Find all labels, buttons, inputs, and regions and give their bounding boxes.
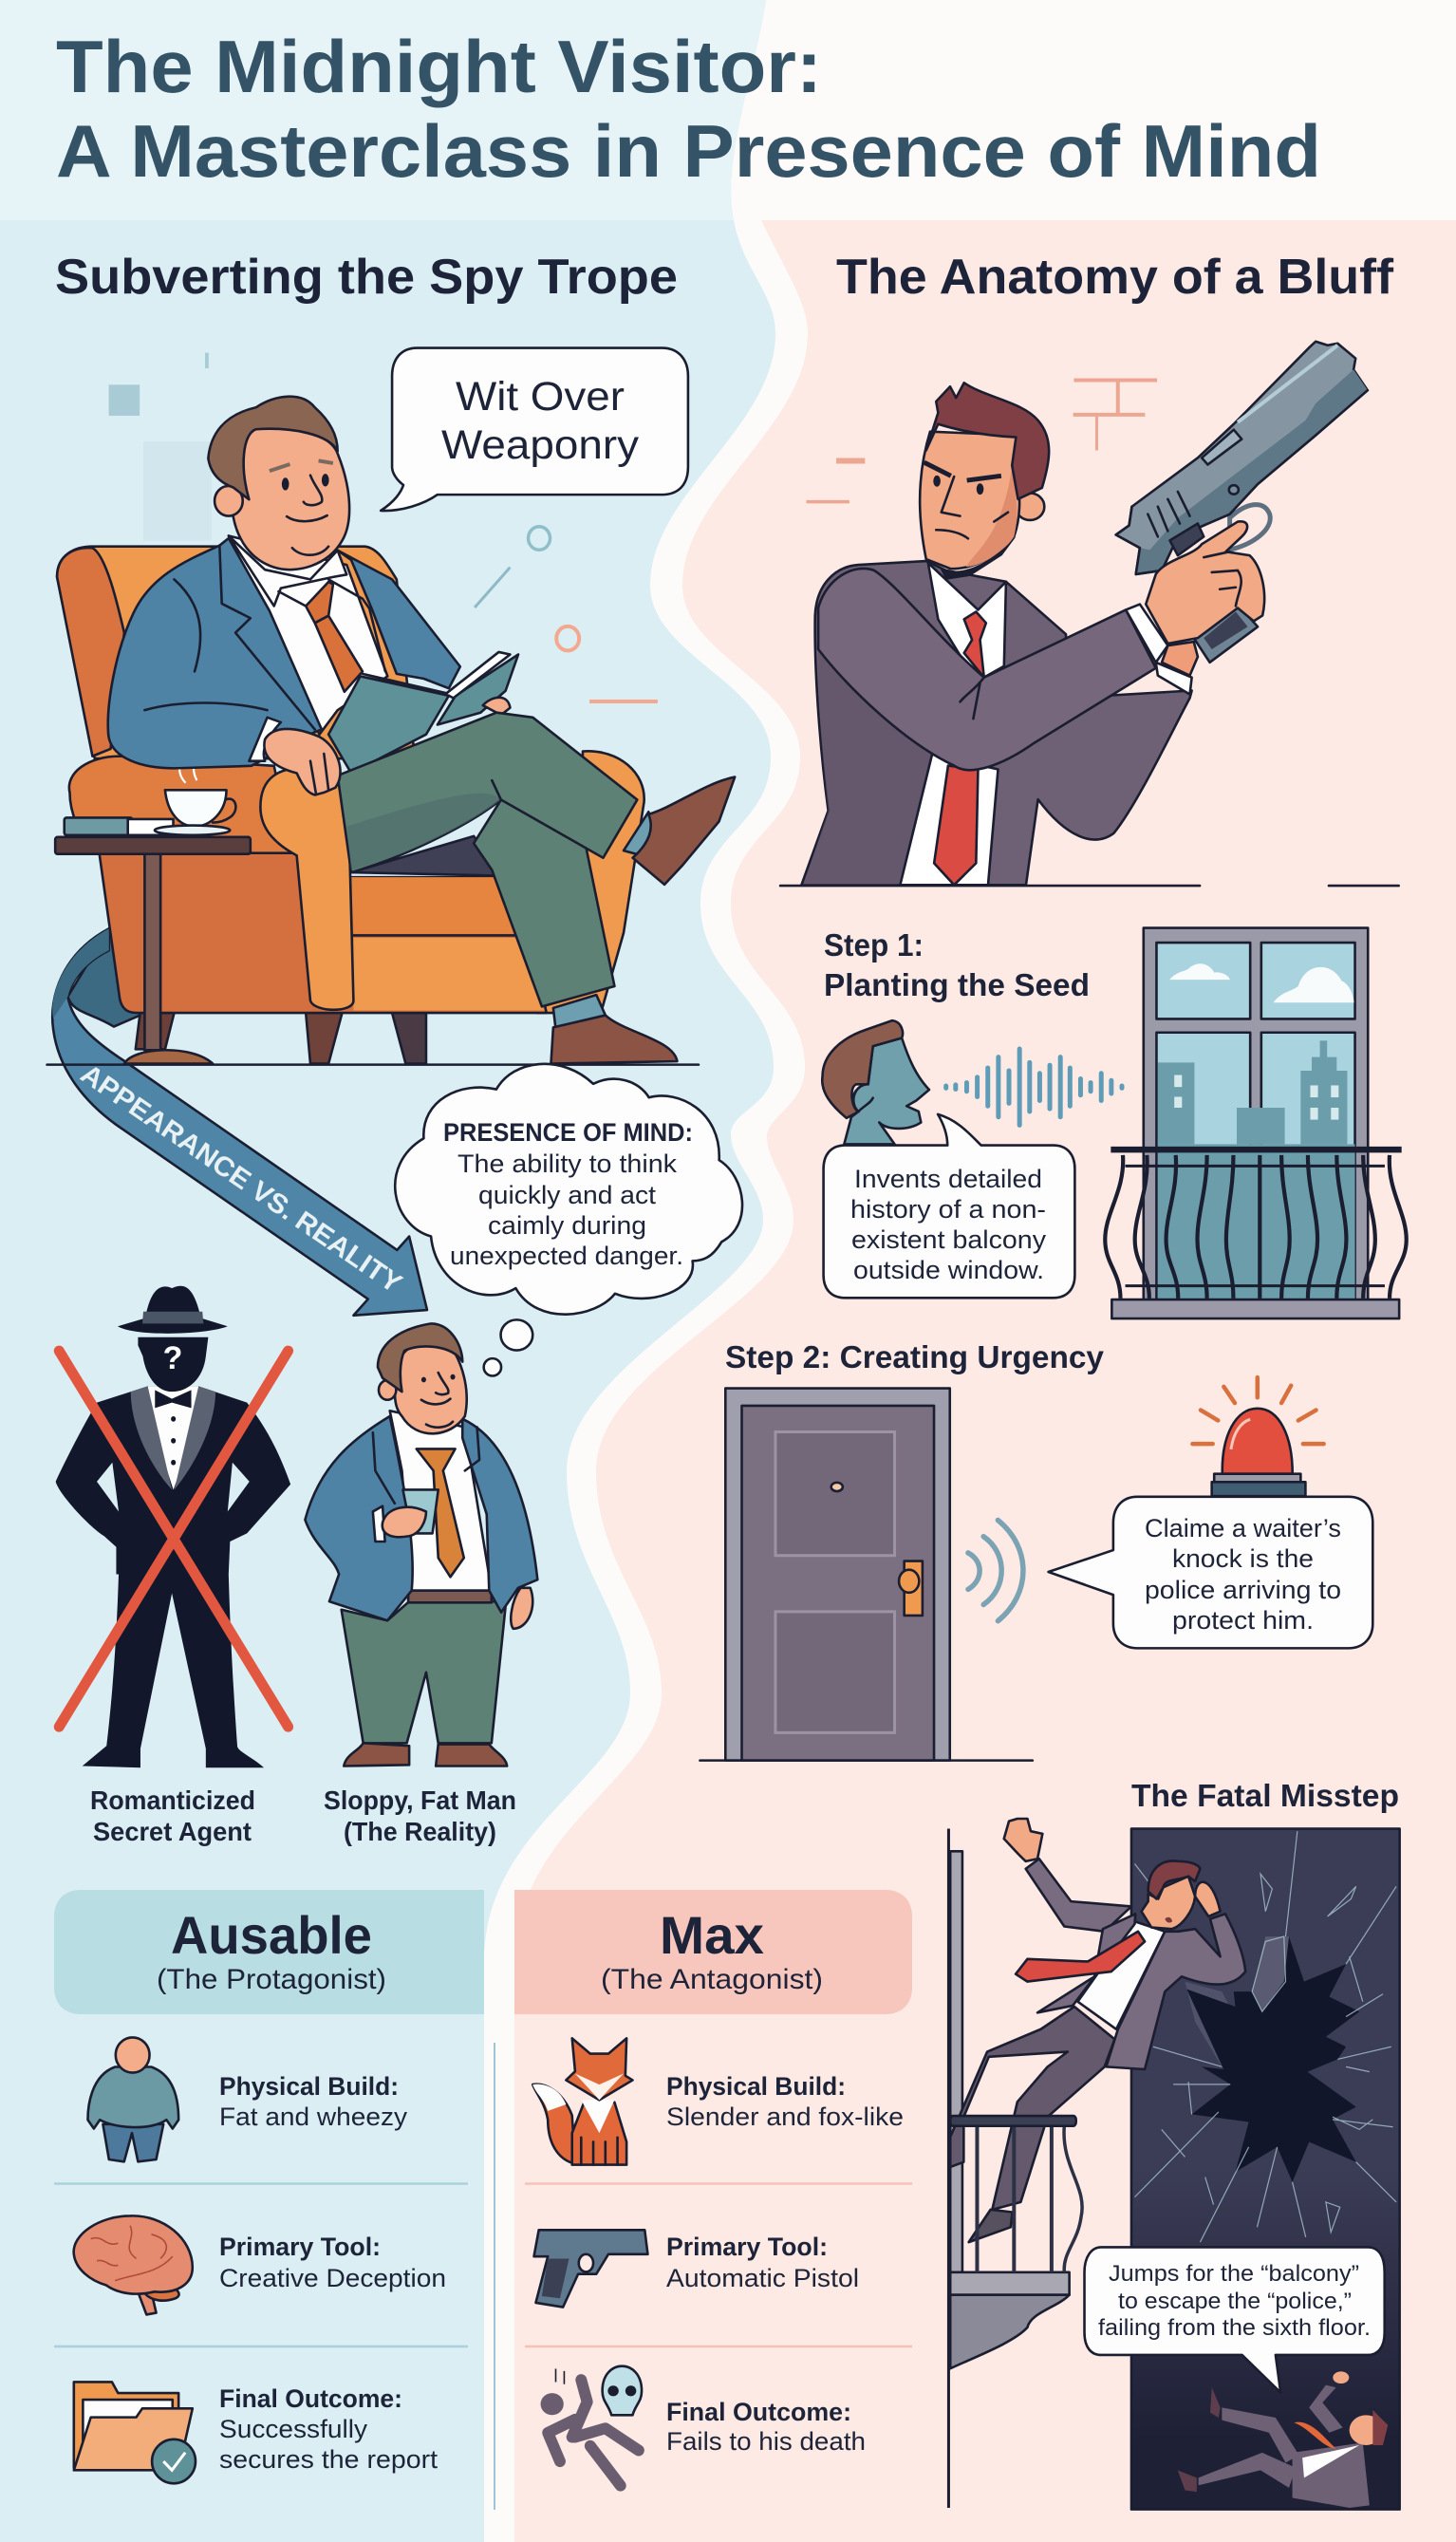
waveform [946, 1049, 1122, 1125]
coffee cup and hand [373, 1489, 532, 1629]
callout: claims a waiter's knock: knock is the [1172, 1544, 1314, 1573]
shirt and tie [900, 563, 1006, 885]
row: final outcome [541, 2366, 866, 2486]
window frame and panes [1144, 928, 1368, 1304]
row: final outcome: Final Outcome: [666, 2398, 851, 2426]
label: romanticized secret agent: Secret Agent [93, 1817, 252, 1846]
callout: jumps for the balcony: Jumps for the “balcony” [1109, 2261, 1359, 2287]
door leaf [742, 1406, 934, 1761]
illustration: window with balcony [1105, 928, 1407, 1318]
falling man on balcony [950, 1819, 1245, 2242]
armchair [57, 547, 644, 1064]
raised arm [818, 569, 1192, 770]
background: pink right panel [514, 220, 1456, 2542]
callout: claims a waiter's knock: police arriving to [1145, 1576, 1341, 1604]
dark building wall [1131, 1829, 1400, 2510]
row: physical build [87, 2037, 408, 2161]
row: physical build: Physical Build: [219, 2072, 399, 2101]
decorative salmon marks [806, 380, 1157, 502]
clouds [1169, 963, 1354, 1002]
arrow: appearance vs reality ribbon: APPEARANCE VS. REALITY [75, 1058, 407, 1299]
callout: invents balcony [824, 1114, 1074, 1298]
suit silhouette [56, 1386, 290, 1767]
door frame [725, 1389, 950, 1761]
thought cloud: presence of mind: unexpected danger. [450, 1242, 683, 1270]
title: A Masterclass in Presence of Mind [56, 109, 1321, 193]
illustration: man aiming pistol [780, 342, 1399, 886]
background: blue left panel [0, 0, 775, 2542]
callout: jumps for the balcony: to escape the “police,” [1118, 2289, 1352, 2314]
callout: jumps for the balcony: failing from the sixth floor. [1098, 2315, 1371, 2341]
row: physical build: Physical Build: [666, 2072, 846, 2101]
floor line [700, 1759, 1033, 1762]
head [378, 1323, 467, 1433]
balcony [950, 2116, 1082, 2368]
callout: claims a waiter's knock: Claime a waiter’s [1145, 1514, 1341, 1542]
callout: invents balcony: outside window. [853, 1256, 1044, 1284]
thought cloud: presence of mind [395, 1064, 742, 1376]
head and hat [118, 1286, 228, 1392]
header: max [514, 1890, 912, 2014]
thought cloud: presence of mind: The ability to think [457, 1150, 678, 1178]
heading: The Anatomy of a Bluff: The Anatomy of a Bluff [836, 250, 1394, 305]
falling man below [1178, 2371, 1388, 2508]
row: final outcome: Fails to his death [666, 2427, 866, 2456]
label: sloppy fat man [324, 1785, 516, 1846]
arm gaps [97, 1463, 250, 1511]
heading: step 1: Step 1: [824, 927, 924, 963]
icon: police siren [1192, 1377, 1324, 1496]
background: top title band tint [0, 0, 766, 220]
label: sloppy fat man: Sloppy, Fat Man [324, 1785, 516, 1815]
hands [1146, 521, 1264, 676]
red cross [59, 1351, 289, 1727]
blue jacket [305, 1416, 537, 1620]
shattered window hole [1185, 1936, 1359, 2182]
door panels [775, 1432, 895, 1732]
pistol [1116, 342, 1368, 663]
glass cracks [1135, 1831, 1396, 2242]
illustration: man reading in armchair [47, 353, 735, 1065]
callout: invents balcony: history of a non- [850, 1195, 1046, 1224]
question mark: ? [163, 1340, 182, 1376]
title: The Midnight Visitor: [56, 25, 822, 108]
header: ausable: Ausable [171, 1905, 372, 1965]
panel: max column [514, 1890, 912, 2486]
row: primary tool: Creative Deception [219, 2264, 446, 2292]
row: primary tool [534, 2230, 859, 2308]
thought cloud: presence of mind: caimly during [488, 1211, 646, 1240]
illustration: door [700, 1389, 1033, 1761]
row: primary tool [74, 2215, 446, 2314]
hand on armrest [249, 718, 341, 794]
shirt and belt [390, 1411, 492, 1602]
trousers [342, 1601, 506, 1743]
heading: the fatal misstep: The Fatal Misstep [1131, 1778, 1399, 1813]
label: romanticized secret agent: Romanticized [90, 1785, 255, 1815]
label: romanticized secret agent [90, 1785, 255, 1846]
row: primary tool: Primary Tool: [666, 2233, 828, 2261]
head profile [822, 1020, 929, 1144]
row: physical build [532, 2038, 904, 2165]
row: final outcome: Final Outcome: [219, 2384, 402, 2413]
balcony railing [1105, 1150, 1407, 1299]
speech bubble: wit over weaponry [381, 348, 688, 511]
header: ausable [54, 1890, 484, 2014]
callout: claims a waiter's knock: protect him. [1172, 1606, 1314, 1635]
heading: step 2: Step 2: Creating Urgency [725, 1339, 1105, 1374]
row: final outcome [74, 2382, 439, 2483]
illustration: sloppy fat man [305, 1323, 537, 1766]
wall edge [948, 1829, 962, 2508]
header: max: (The Antagonist) [601, 1964, 823, 1995]
crossed green trousers and shoes [338, 713, 735, 1064]
side table with cup [55, 738, 251, 1064]
speech bubble: wit over weaponry: Weaponry [441, 422, 640, 468]
city skyline [1158, 1040, 1355, 1299]
panel: fatal misstep illustration [948, 1819, 1400, 2510]
row: primary tool: Automatic Pistol [666, 2264, 859, 2292]
callout: invents balcony: existent balcony [851, 1225, 1047, 1254]
balcony floor [1111, 1299, 1399, 1318]
callout: claims a waiter's knock [1049, 1497, 1372, 1648]
thought cloud: presence of mind: PRESENCE OF MIND: [443, 1118, 693, 1147]
peephole [831, 1483, 843, 1491]
speech bubble: wit over weaponry: Wit Over [456, 374, 625, 420]
row: final outcome: Successfully [219, 2415, 368, 2443]
heading: Subverting the Spy Trope: Subverting the Spy Trope [55, 250, 678, 305]
man in blue jacket [108, 397, 460, 768]
title [56, 25, 1321, 193]
callout: jumps for the balcony [1085, 2247, 1385, 2393]
row: primary tool: Primary Tool: [219, 2233, 381, 2261]
floor lines [780, 885, 1399, 887]
illustration: romanticized secret agent crossed out [56, 1286, 290, 1767]
door handle [899, 1561, 923, 1616]
header: max: Max [660, 1905, 764, 1965]
heading: step 1: Planting the Seed [824, 967, 1090, 1002]
row: physical build: Fat and wheezy [219, 2103, 408, 2131]
open book [328, 652, 518, 773]
header: ausable: (The Protagonist) [157, 1964, 386, 1995]
suit body [801, 561, 1192, 885]
floor line [47, 1063, 699, 1066]
thought cloud: presence of mind: quickly and act [478, 1181, 657, 1209]
shoes [344, 1743, 507, 1766]
heading: step 1 [824, 927, 1090, 1002]
knock sound waves [968, 1520, 1023, 1621]
callout: invents balcony: Invents detailed [854, 1165, 1042, 1193]
head [920, 383, 1049, 580]
icon: speaking head and waveform [822, 1020, 1122, 1144]
row: physical build: Slender and fox-like [666, 2103, 904, 2131]
label: sloppy fat man: (The Reality) [344, 1817, 496, 1846]
panel: ausable column [54, 1890, 484, 2483]
decorative shapes [109, 353, 658, 701]
tuxedo front [131, 1386, 215, 1489]
row: final outcome: secures the report [219, 2445, 439, 2474]
arrow: appearance vs reality ribbon [52, 928, 427, 1316]
